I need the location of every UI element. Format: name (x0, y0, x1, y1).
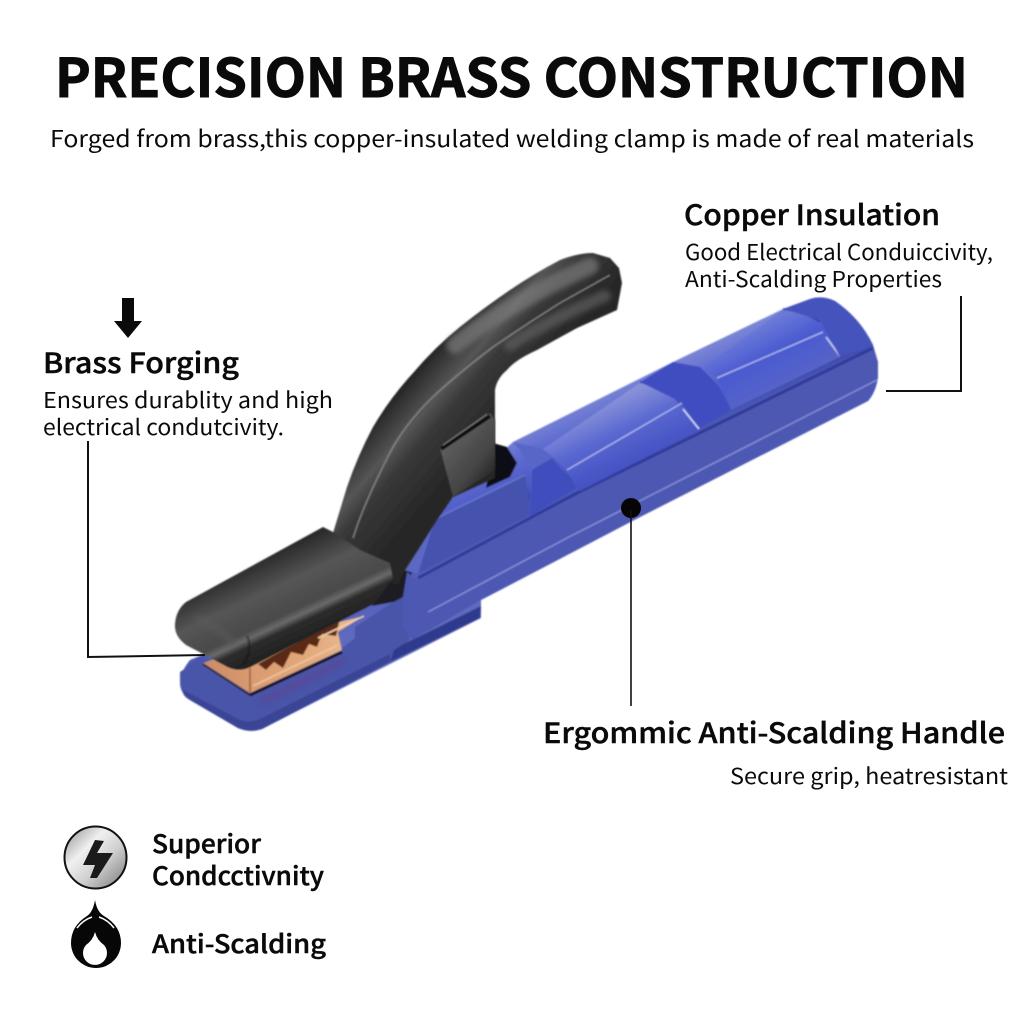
title: PRECISION BRASS CONSTRUCTION (55, 37, 968, 113)
front block (404, 475, 531, 574)
thin highlight line (428, 380, 877, 612)
lever grey sheen (455, 266, 590, 345)
lever inner sheen (510, 296, 605, 345)
copper teeth (203, 616, 364, 695)
description (43, 383, 333, 442)
dark window (486, 443, 517, 488)
subtitle: Forged from brass,this copper-insulated welding clamp is made of real materials (50, 120, 974, 154)
icon: lightning bolt (64, 826, 126, 888)
icon: down arrow (114, 298, 142, 338)
tooth shadows (258, 618, 340, 670)
lever ridge (353, 275, 610, 538)
flared shoulder (513, 442, 577, 516)
description: Ensures durablity and high (43, 383, 333, 415)
rib panel 2 (702, 310, 840, 410)
dark fill behind jaw hinge (372, 560, 412, 606)
heading: Copper Insulation (684, 194, 940, 234)
callout: brass forging (43, 298, 333, 657)
feature: anti-scalding (71, 900, 327, 968)
description: Secure grip, heatresistant (730, 759, 1008, 791)
callout: copper insulation (684, 194, 993, 391)
heading: Ergommic Anti-Scalding Handle (543, 712, 1005, 752)
marker dot (621, 498, 641, 518)
jaw corner crease (243, 636, 250, 664)
centre band (640, 362, 731, 428)
handle end cap (783, 297, 873, 357)
leader line (886, 296, 961, 391)
blue handle body (180, 297, 878, 731)
leader line (630, 510, 632, 706)
description (685, 235, 993, 294)
callout: handle (543, 498, 1008, 791)
lever notch (440, 413, 495, 497)
feature: superior conductivity (64, 825, 324, 893)
lower tab (390, 606, 481, 662)
rib panel 1 (543, 383, 700, 491)
description: Good Electrical Conduiccivity, (685, 235, 993, 267)
label: Anti-Scalding (152, 925, 327, 961)
black lever (325, 253, 622, 585)
jaw end sheen (198, 618, 232, 642)
lower body band (403, 347, 878, 640)
description: Anti-Scalding Properties (685, 262, 942, 294)
label (152, 825, 324, 893)
label: Superior (152, 825, 262, 861)
leader line (88, 441, 205, 657)
icon: flame drop (71, 900, 121, 968)
label: Condcctivnity (152, 857, 324, 893)
black upper jaw (175, 527, 393, 670)
lower jaw front edge (183, 654, 390, 731)
heading: Brass Forging (43, 342, 239, 382)
welding clamp illustration (175, 253, 878, 731)
purple tint on lower jaw (262, 660, 345, 702)
lower jaw face (180, 597, 410, 731)
description: electrical condutcivity. (43, 410, 284, 442)
